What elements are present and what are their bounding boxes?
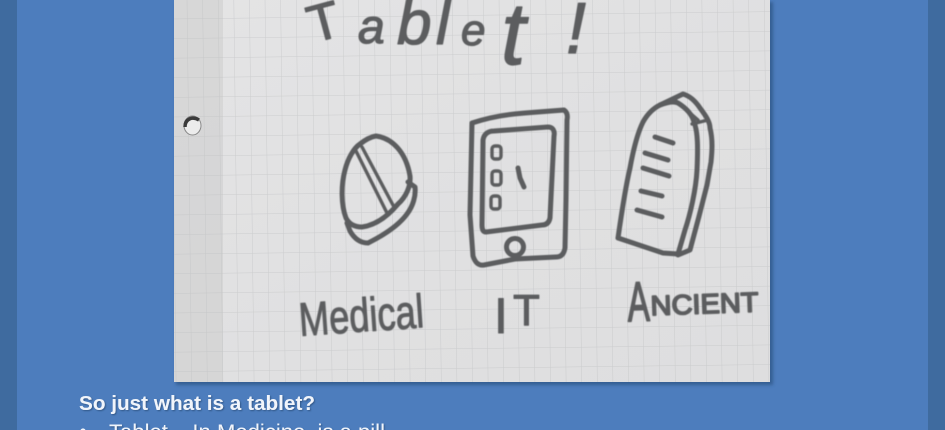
icon: IT tablet device (470, 110, 567, 265)
handwritten label: IT: T (513, 286, 540, 335)
handwritten label: IT: I (494, 288, 508, 344)
handwritten heading: a (358, 1, 385, 54)
handwritten label: Ancient: A (626, 269, 651, 333)
handwritten label: Ancient: NCIENT (650, 287, 759, 321)
text block: caption heading: So just what is a tablet? (79, 393, 315, 415)
handwritten label: Medical: Medical (297, 284, 425, 346)
icon: ancient stone tablet (618, 94, 712, 255)
icon: punched hole in paper (184, 116, 201, 135)
handwritten heading: e (461, 6, 485, 55)
photo: hand-drawn tablet sketch on grid paper (174, 0, 773, 385)
icon: medical pill (342, 136, 415, 243)
